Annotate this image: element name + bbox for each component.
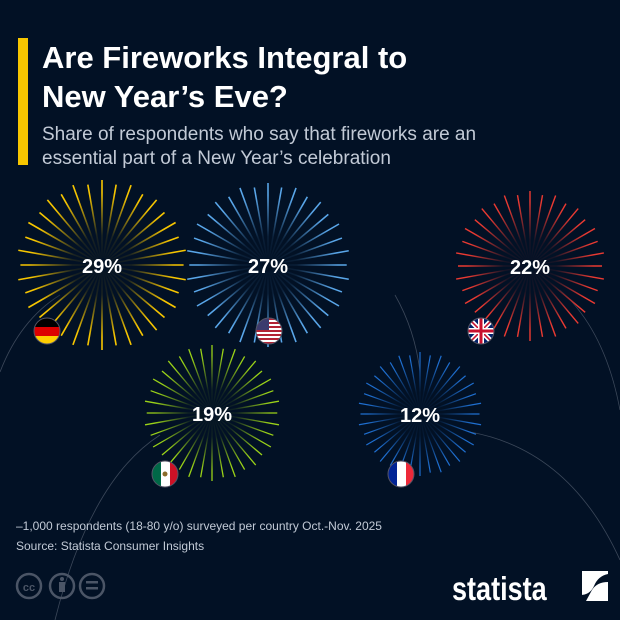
subtitle: Share of respondents who say that fireworks are an [42,124,476,145]
logo: statista [452,571,608,608]
burst: France 12% [358,352,482,476]
icons: cc by nd [17,574,104,598]
source: Source: Statista Consumer Insights [16,539,204,553]
footnote: –1,000 respondents (18-80 y/o) surveyed per country Oct.-Nov. 2025 [16,519,382,533]
burst: Mexico 19%: 19% [192,404,232,426]
flag: Germany [34,318,60,345]
flag: Mexico [152,461,179,487]
burst: USA 27% [186,183,350,347]
flag: France [388,461,415,487]
burst: France 12%: 12% [400,405,440,427]
title accent bar [18,38,28,165]
firework trails [0,290,620,620]
burst: Germany 29%: 29% [82,256,122,278]
subtitle line 2: essential part of a New Year’s celebration [42,148,391,169]
burst: Mexico 19% [144,345,280,481]
title line 2: New Year’s Eve? [42,79,288,114]
title: Are Fireworks Integral to [42,40,407,75]
burst: UK 22%: 22% [510,257,550,279]
burst: UK 22% [455,191,605,341]
logo: statista: statista [452,572,547,608]
icons: cc by nd: cc [23,582,35,594]
burst: USA 27%: 27% [248,256,288,278]
flag: UK [468,318,494,344]
flag: USA [256,318,282,344]
burst: Germany 29% [17,180,187,350]
